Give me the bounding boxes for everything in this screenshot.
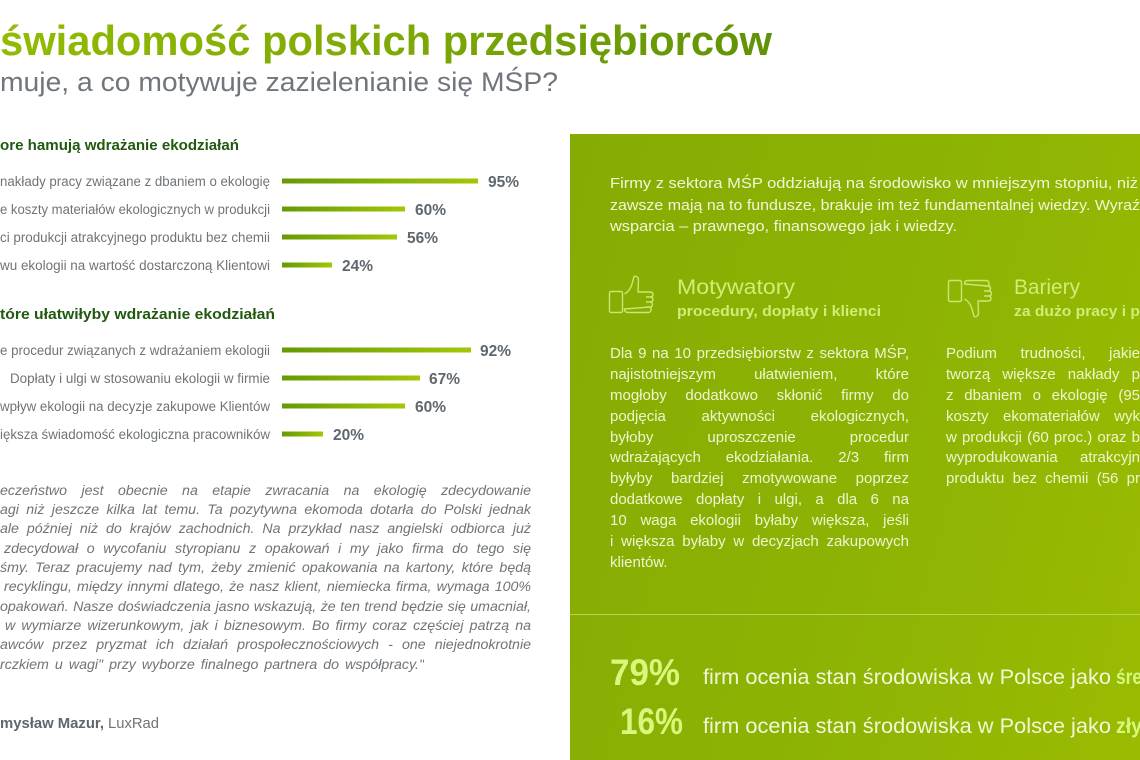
motivators header: Motywatory bbox=[677, 276, 796, 299]
intro text bbox=[609, 174, 1140, 235]
chart: facilitators: wpływ ekologii na decyzje zakupowe Klientów bbox=[0, 399, 270, 414]
quote: w wymiarze wizerunkowym, jak i biznesowym. Bo firmy coraz częściej patrzą na bbox=[5, 618, 531, 634]
barriers text: w produkcji (60 proc.) oraz b bbox=[946, 429, 1140, 446]
barriers text: Podium trudności, jakie bbox=[946, 345, 1140, 362]
chart: facilitators: 67% bbox=[429, 371, 460, 388]
intro text: zawsze mają na to fundusze, brakuje im też fundamentalnej wiedzy. Wyraź bbox=[610, 198, 1140, 214]
barriers header: Bariery bbox=[1014, 276, 1080, 299]
chart: barriers: ore hamują wdrażanie ekodziałań bbox=[0, 138, 239, 154]
chart: facilitators bbox=[0, 307, 511, 444]
chart: facilitators: 60% bbox=[415, 399, 446, 416]
chart: facilitators: iększa świadomość ekologiczna pracowników bbox=[0, 427, 270, 442]
stat: 16%: firm ocenia stan środowiska w Polsce jako bbox=[703, 715, 1111, 738]
barriers header: za dużo pracy i p bbox=[1014, 304, 1140, 320]
motivators text: 10 waga ekologii byłaby większa, jeśli bbox=[610, 512, 909, 529]
stat: 16% bbox=[620, 701, 1140, 742]
stat: 79%: 79% bbox=[610, 652, 680, 693]
motivators text: wdrażających ekodziałania. 2/3 firm bbox=[610, 449, 909, 466]
statistics bbox=[610, 652, 1140, 742]
motivators header: procedury, dopłaty i klienci bbox=[677, 304, 881, 320]
quote: rczkiem u wagi" przy wyborze finalnego partnera do współpracy." bbox=[0, 657, 424, 673]
chart: barriers: 60% bbox=[415, 202, 446, 219]
quote author: LuxRad bbox=[108, 716, 159, 732]
motivators text: podjęcia aktywności ekologicznych, bbox=[610, 408, 909, 425]
icon: thumbs down bbox=[948, 280, 992, 317]
stat: 16%: 16% bbox=[620, 701, 683, 742]
barriers header bbox=[948, 276, 1140, 320]
chart: facilitators: 92% bbox=[480, 343, 511, 360]
chart: barriers: nakłady pracy związane z dbaniem o ekologię bbox=[0, 174, 270, 189]
title and subtitle: muje, a co motywuje zazielenianie się MŚP? bbox=[0, 65, 558, 97]
chart: barriers bbox=[0, 138, 519, 275]
icon: thumbs up bbox=[610, 276, 653, 312]
stat: 79% bbox=[610, 652, 1140, 693]
quote: awców przez pryzmat ich działań prospołecznościowych - one niejednokrotnie bbox=[0, 637, 531, 653]
quote bbox=[0, 483, 531, 673]
motivators text: najistotniejszym ułatwieniem, które bbox=[610, 366, 909, 383]
divider bbox=[570, 614, 1140, 615]
quote: zdecydował o wycofaniu styropianu z opakowań i my jako firma do tego się bbox=[4, 541, 531, 557]
motivators text: klientów. bbox=[610, 554, 668, 571]
barriers text bbox=[946, 345, 1140, 487]
motivators text: dodatkowe dopłaty i ulgi, a dla 6 na bbox=[610, 491, 909, 508]
chart: barriers: 24% bbox=[342, 258, 373, 275]
panel: left column bbox=[0, 17, 772, 732]
chart: facilitators: tóre ułatwiłyby wdrażanie ekodziałań bbox=[0, 307, 275, 323]
intro text: wsparcia – prawnego, finansowego jak i wiedzy. bbox=[609, 219, 957, 235]
quote: agi niż jeszcze kilka lat temu. Ta pozytywna ekomoda dotarła do Polski jednak bbox=[0, 502, 531, 518]
quote: recyklingu, między innymi dlatego, że nasz klient, niemiecka firma, wymaga 100% bbox=[4, 579, 531, 595]
quote: śmy. Teraz pracujemy nad tym, żeby zmienić opakowania na kartony, które będą bbox=[0, 560, 531, 576]
motivators text bbox=[610, 344, 909, 571]
chart: barriers: ci produkcji atrakcyjnego produktu bez chemii bbox=[0, 230, 270, 245]
panel: green right column bbox=[570, 134, 1140, 760]
chart: barriers: 56% bbox=[407, 230, 438, 247]
motivators text: i większa byłaby w decyzjach zakupowych bbox=[610, 533, 909, 550]
title and subtitle: świadomość polskich przedsiębiorców bbox=[0, 17, 772, 64]
barriers text: tworzą większe nakłady p bbox=[946, 366, 1140, 383]
quote: opakowań. Nasze doświadczenia jasno wskazują, że ten trend będzie się umacniał, bbox=[0, 599, 531, 615]
chart: barriers: wu ekologii na wartość dostarczoną Klientowi bbox=[0, 258, 270, 273]
motivators header bbox=[608, 276, 881, 320]
motivators text: byłyby bardziej zmotywowane poprzez bbox=[610, 470, 909, 487]
chart: barriers: 95% bbox=[488, 174, 519, 191]
chart: facilitators: e procedur związanych z wdrażaniem ekologii bbox=[0, 343, 270, 358]
stat: 79%: firm ocenia stan środowiska w Polsce jako bbox=[703, 666, 1111, 689]
chart: facilitators: Dopłaty i ulgi w stosowaniu ekologii w firmie bbox=[10, 371, 270, 386]
quote author bbox=[0, 716, 159, 732]
motivators text: mogłoby dodatkowo skłonić firmy do bbox=[610, 387, 909, 404]
barriers text: wyprodukowania atrakcyjn bbox=[946, 449, 1140, 466]
barriers text: produktu bez chemii (56 pr bbox=[946, 470, 1140, 487]
quote author: mysław Mazur, bbox=[0, 716, 104, 732]
motivators text: byłoby uproszczenie procedur bbox=[610, 429, 909, 446]
chart: facilitators: 20% bbox=[333, 427, 364, 444]
intro text: Firmy z sektora MŚP oddziałują na środowisko w mniejszym stopniu, niż bbox=[610, 174, 1138, 192]
chart: barriers: e koszty materiałów ekologicznych w produkcji bbox=[0, 202, 270, 217]
motivators text: Dla 9 na 10 przedsiębiorstw z sektora MŚP, bbox=[610, 345, 909, 362]
barriers text: koszty ekomateriałów wyk bbox=[946, 408, 1140, 425]
quote: ale później niż do krajów zachodnich. Na przykład nasz angielski odbiorca już bbox=[0, 521, 531, 537]
quote: eczeństwo jest obecnie na etapie zwracania na ekologię zdecydowanie bbox=[0, 483, 531, 499]
barriers text: z dbaniem o ekologię (95 bbox=[946, 387, 1140, 404]
title and subtitle bbox=[0, 17, 772, 97]
